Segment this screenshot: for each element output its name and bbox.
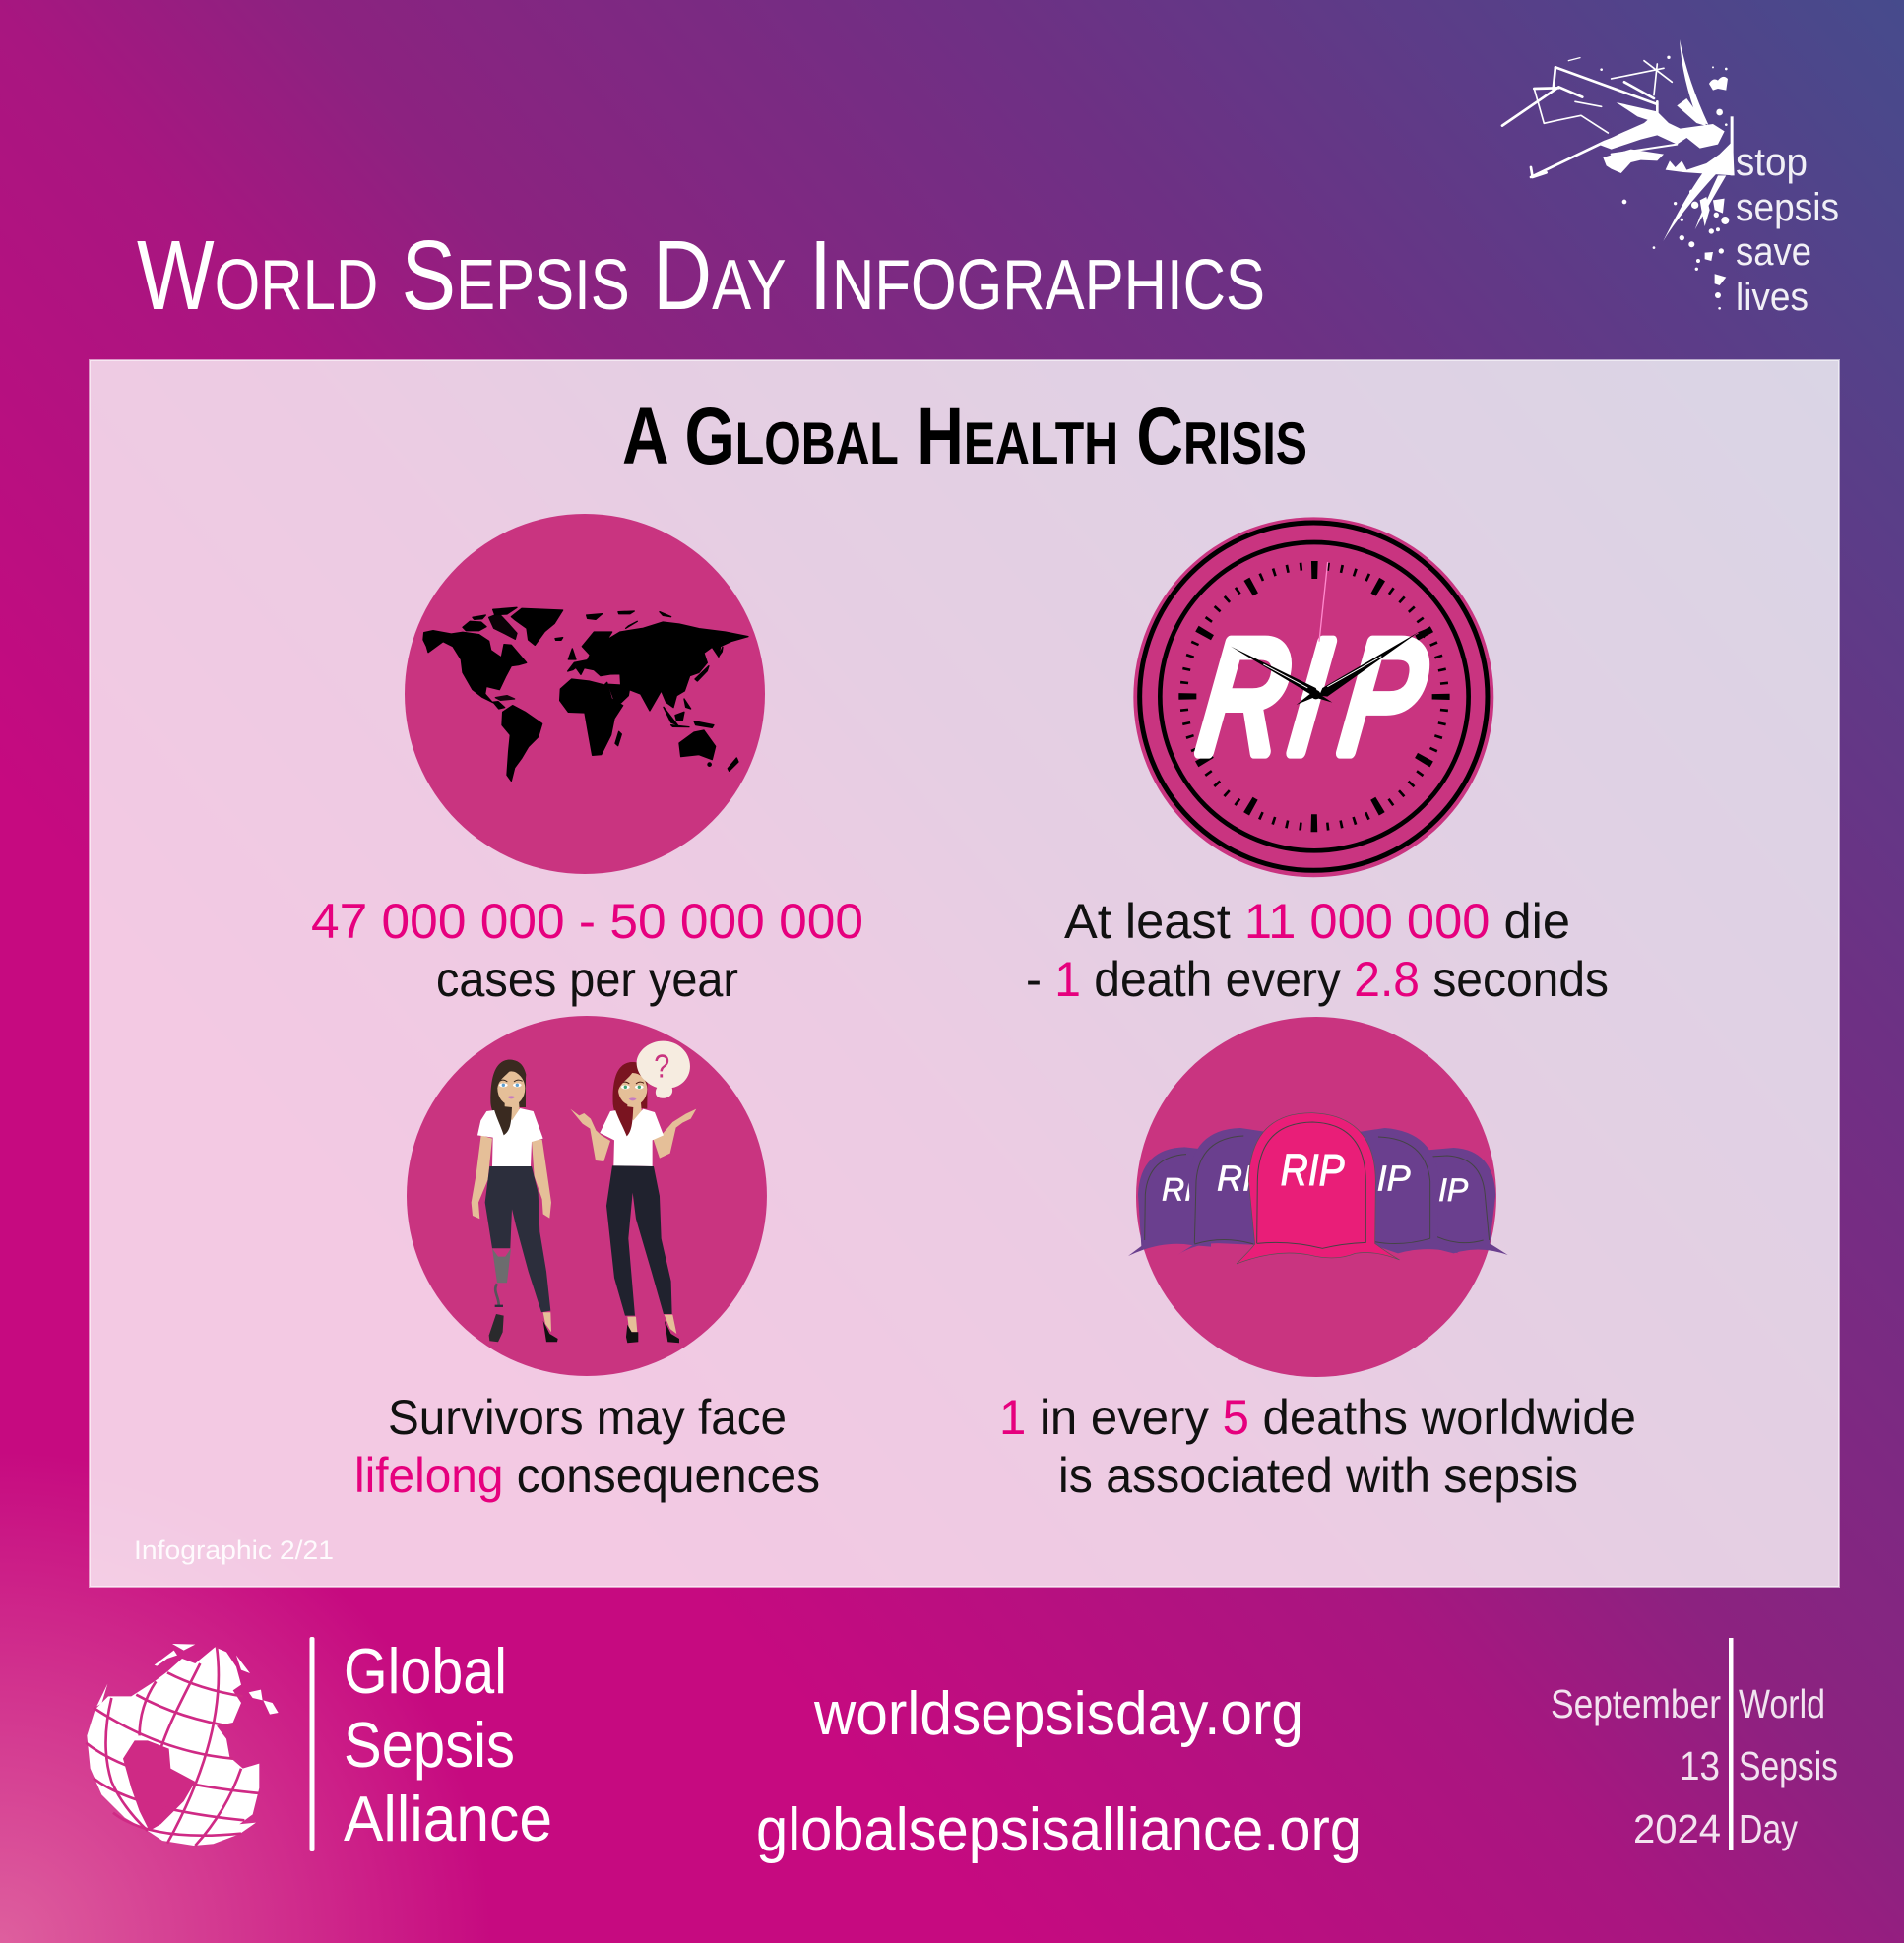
title: WORLD SEPSIS DAY INFOGRAPHICS bbox=[137, 220, 1265, 331]
icon: white splash bbox=[1502, 39, 1735, 310]
thought bubble: ? bbox=[654, 1048, 669, 1085]
footer links: worldsepsisday.org bbox=[813, 1680, 1303, 1748]
stat: lifelong consequences bbox=[354, 1390, 820, 1503]
second right gravestone bbox=[1359, 1128, 1459, 1253]
infographic number: Infographic 2/21 bbox=[134, 1536, 334, 1565]
stat: deaths: At least 11 000 000 die bbox=[1064, 894, 1570, 949]
stat: deaths: - 1 death every 2.8 seconds bbox=[1026, 952, 1609, 1007]
footer date block: 2024 bbox=[1633, 1806, 1721, 1851]
figure: confused woman bbox=[570, 1062, 696, 1343]
organisation name: Sepsis bbox=[344, 1709, 515, 1781]
footer logo: global sepsis alliance bbox=[86, 1635, 552, 1854]
stat: lifelong consequences: Survivors may face bbox=[388, 1390, 787, 1445]
panel heading: A GLOBAL HEALTH CRISIS bbox=[622, 392, 1307, 481]
footer date block bbox=[1551, 1638, 1838, 1851]
circle: survivors bbox=[407, 1016, 767, 1376]
logo tagline: lives bbox=[1736, 276, 1809, 319]
figure: woman with prosthetic leg bbox=[472, 1060, 558, 1342]
icon: world map bbox=[423, 607, 748, 781]
thought bubble bbox=[637, 1041, 690, 1098]
far left gravestone bbox=[1128, 1147, 1211, 1256]
footer date block: 13 bbox=[1680, 1743, 1720, 1788]
far left gravestone: RI bbox=[1162, 1171, 1193, 1207]
second left gravestone bbox=[1177, 1128, 1267, 1255]
second left gravestone: RI bbox=[1217, 1158, 1252, 1198]
circle: RIP clock bbox=[1133, 517, 1493, 877]
stat: deaths bbox=[1026, 894, 1609, 1007]
footer links: globalsepsisalliance.org bbox=[756, 1796, 1362, 1864]
footer date block: September bbox=[1551, 1681, 1721, 1726]
stat: one in five deaths: 1 in every 5 deaths worldwide bbox=[999, 1390, 1636, 1445]
logo tagline: save bbox=[1736, 230, 1811, 274]
logo tagline: stop bbox=[1736, 141, 1808, 184]
footer date block: Sepsis bbox=[1739, 1743, 1838, 1788]
centre gravestone: RIP bbox=[1281, 1145, 1345, 1195]
stat: one in five deaths: is associated with sepsis bbox=[1058, 1448, 1578, 1503]
far right gravestone: IP bbox=[1438, 1172, 1469, 1208]
stat: one in five deaths bbox=[999, 1390, 1636, 1503]
organisation name: Alliance bbox=[344, 1783, 552, 1854]
clock hands bbox=[1231, 562, 1430, 705]
organisation name bbox=[344, 1635, 552, 1854]
logo tagline bbox=[1736, 141, 1839, 319]
panel: global health crisis bbox=[90, 360, 1839, 1587]
clock ticks bbox=[1183, 566, 1445, 827]
organisation name: Global bbox=[344, 1635, 507, 1707]
logo: stop sepsis save lives bbox=[1502, 39, 1839, 319]
clock rings bbox=[1140, 523, 1488, 870]
stat: lifelong consequences: lifelong consequences bbox=[354, 1448, 820, 1503]
footer date block: World bbox=[1739, 1681, 1825, 1726]
stat: cases per year: cases per year bbox=[436, 952, 738, 1007]
far right gravestone bbox=[1428, 1148, 1508, 1255]
RIP lettering: RIP bbox=[1190, 607, 1434, 787]
second right gravestone: IP bbox=[1377, 1158, 1411, 1198]
footer date block: Day bbox=[1739, 1806, 1798, 1851]
stat: cases per year: 47 000 000 - 50 000 000 bbox=[311, 894, 863, 949]
centre gravestone bbox=[1237, 1113, 1400, 1264]
icon: globe bbox=[86, 1644, 279, 1846]
footer links bbox=[756, 1680, 1362, 1864]
circle: gravestones bbox=[1128, 1017, 1508, 1377]
logo tagline: sepsis bbox=[1736, 186, 1839, 229]
divider bbox=[309, 1637, 315, 1851]
stat: cases per year bbox=[311, 894, 863, 1007]
circle: world map bbox=[405, 514, 765, 874]
